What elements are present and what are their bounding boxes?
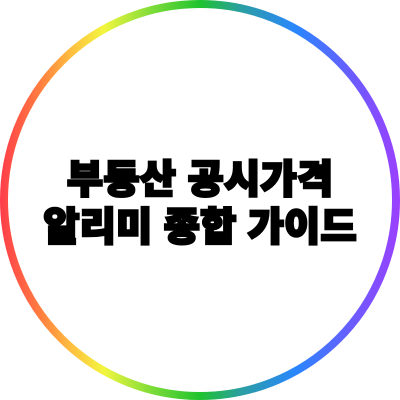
title	[44, 159, 356, 250]
title line 1: 부동산 공시가격	[67, 159, 333, 202]
title line 2: 알리미 종합 가이드	[44, 206, 356, 250]
